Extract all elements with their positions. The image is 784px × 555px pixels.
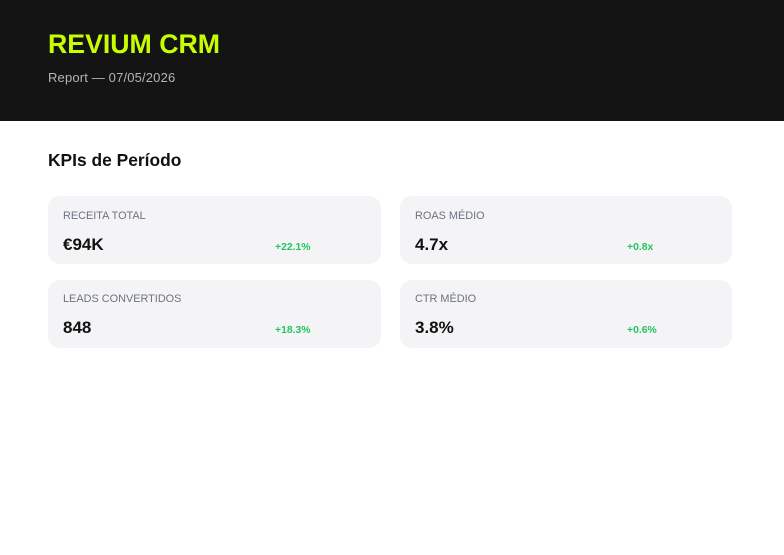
section heading: KPIs de Período [48, 150, 181, 170]
value: 848 [63, 318, 91, 336]
panel: roas medio [400, 196, 732, 264]
title: REVIUM CRM [48, 29, 220, 59]
value: 3.8% [415, 318, 454, 336]
panel: ctr medio [400, 280, 732, 348]
header band [0, 0, 784, 121]
delta: +18.3% [275, 324, 311, 336]
delta: +0.8x [627, 242, 653, 252]
label: CTR MÉDIO [415, 292, 476, 304]
delta: +22.1% [275, 242, 311, 252]
delta: +0.6% [627, 324, 657, 336]
panel: leads convertidos [48, 280, 380, 348]
label: ROAS MÉDIO [415, 210, 485, 222]
report date: Report — 07/05/2026 [48, 70, 175, 85]
label: RECEITA TOTAL [63, 210, 146, 222]
label: LEADS CONVERTIDOS [63, 292, 181, 304]
value: 4.7x [415, 234, 448, 254]
panel: receita total [48, 196, 380, 264]
value: €94K [63, 234, 104, 254]
